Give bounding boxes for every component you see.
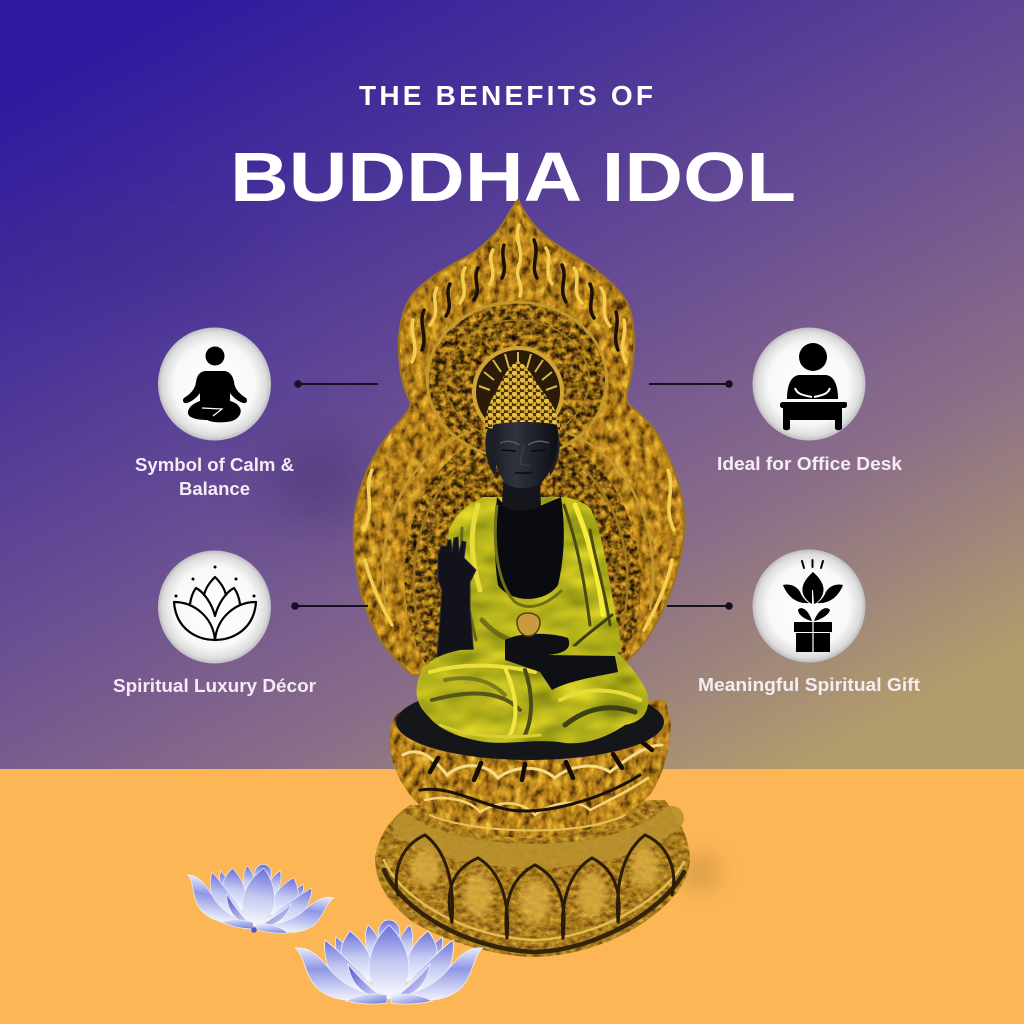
ushnisha hair — [484, 361, 561, 430]
label: symbol of calm and balance: Balance — [179, 479, 250, 499]
large lotus flower — [295, 920, 483, 1004]
label: ideal for office desk: Ideal for Office Desk — [717, 454, 903, 474]
inner filigree upper arch — [429, 304, 605, 456]
collar — [495, 505, 562, 606]
facial features — [500, 441, 549, 473]
icon: line lotus — [158, 550, 271, 664]
halo ring lines — [383, 302, 653, 650]
background gradient — [0, 0, 1024, 770]
title: the benefits of: THE BENEFITS OF — [359, 80, 653, 111]
icon: person at desk — [752, 328, 866, 440]
leg folds — [430, 666, 640, 737]
connector line: calm — [294, 380, 378, 388]
statue halo backdrop — [354, 200, 684, 675]
robe fold highlights — [462, 505, 612, 650]
face — [492, 422, 558, 488]
label: spiritual luxury decor: Spiritual Luxury Décor — [113, 676, 316, 696]
label: symbol of calm and balance — [135, 455, 294, 499]
buddha idol statue — [113, 200, 920, 1004]
band petal scrolls — [403, 742, 662, 830]
gold alms bowl — [517, 613, 540, 636]
base petals — [384, 818, 684, 952]
hands and forearm — [505, 634, 618, 690]
label: symbol of calm and balance: Symbol of Calm & — [135, 455, 294, 475]
raised arm and hand — [437, 537, 476, 658]
title: buddha idol: BUDDHA IDOL — [230, 138, 796, 216]
crossed legs — [417, 645, 648, 743]
neck — [502, 482, 541, 510]
icon: gift with lotus — [752, 550, 866, 662]
small lotus flower — [180, 853, 338, 944]
ears — [485, 428, 560, 476]
label: meaningful spiritual gift: Meaningful Spiritual Gift — [698, 675, 920, 695]
orange floor — [0, 769, 1024, 1024]
body chest — [495, 497, 564, 599]
black platform — [396, 684, 664, 760]
flame marks — [364, 225, 674, 630]
lower base — [375, 800, 690, 957]
icon: floor shadow — [678, 852, 722, 892]
halo rays — [479, 352, 557, 390]
head halo — [474, 348, 562, 436]
connector line: gift — [667, 602, 733, 610]
connector line: office — [649, 380, 733, 388]
connector line: decor — [291, 602, 368, 610]
robe upper — [445, 497, 622, 652]
upper lotus band — [390, 700, 671, 838]
icon: meditating person — [158, 328, 271, 440]
inner filigree lower panel — [404, 445, 641, 670]
